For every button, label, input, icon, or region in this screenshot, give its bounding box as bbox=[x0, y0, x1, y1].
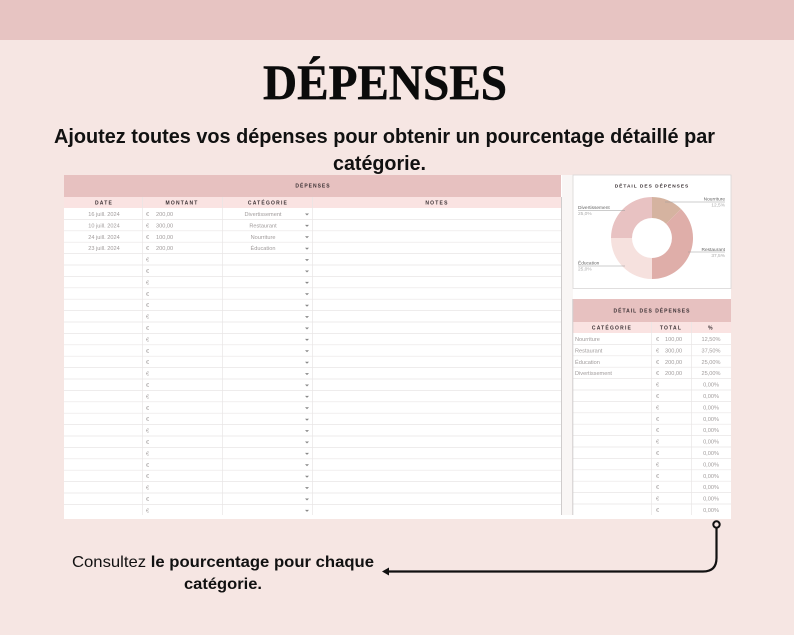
expense rows: € bbox=[146, 372, 150, 378]
category rows: € bbox=[656, 451, 660, 457]
category rows: € bbox=[656, 508, 660, 514]
arrow bbox=[382, 521, 720, 576]
dropdown arrows bbox=[305, 214, 309, 512]
expense rows: € bbox=[146, 303, 150, 309]
category column headers: TOTAL bbox=[660, 326, 682, 332]
category rows: 37,50% bbox=[702, 348, 721, 354]
expense rows: Nourriture bbox=[251, 235, 275, 241]
chart labels: 25,0% bbox=[578, 266, 592, 272]
expense rows: € bbox=[146, 212, 150, 218]
category rows: 200,00 bbox=[665, 371, 682, 377]
expense rows: € bbox=[146, 440, 150, 446]
expense rows: € bbox=[146, 394, 150, 400]
chart title: DÉTAIL DES DÉPENSES bbox=[615, 182, 689, 190]
chart labels: 25,0% bbox=[578, 211, 592, 217]
expense rows: € bbox=[146, 280, 150, 286]
category rows: € bbox=[656, 485, 660, 491]
category rows: € bbox=[656, 462, 660, 468]
callout text: Consultez le pourcentage pour chaque bbox=[72, 554, 374, 571]
chart labels: Éducation bbox=[578, 260, 600, 266]
expense rows: € bbox=[146, 235, 150, 241]
expense rows: € bbox=[146, 258, 150, 264]
expenses column headers: MONTANT bbox=[165, 200, 199, 206]
expense rows: 23 juill. 2024 bbox=[88, 246, 120, 252]
category column headers: CATÉGORIE bbox=[592, 324, 632, 332]
category rows: 0,00% bbox=[703, 474, 719, 480]
chart labels: Restaurant bbox=[702, 247, 726, 253]
expense rows: € bbox=[146, 429, 150, 435]
category rows: 0,00% bbox=[703, 440, 719, 446]
category rows: € bbox=[656, 371, 660, 377]
expense rows: € bbox=[146, 486, 150, 492]
expense rows: Divertissement bbox=[244, 212, 282, 218]
expense rows: 100,00 bbox=[156, 235, 173, 241]
category rows: 25,00% bbox=[702, 360, 721, 366]
category rows: € bbox=[656, 440, 660, 446]
expense rows: 200,00 bbox=[156, 212, 173, 218]
expense rows: € bbox=[146, 292, 150, 298]
chart labels: 12,5% bbox=[711, 202, 726, 208]
category rows: € bbox=[656, 360, 660, 366]
category rows: 0,00% bbox=[703, 428, 719, 434]
expense rows: € bbox=[146, 326, 150, 332]
category rows: 0,00% bbox=[703, 508, 719, 514]
expense rows: € bbox=[146, 463, 150, 469]
category rows: Nourriture bbox=[575, 337, 600, 343]
category rows: 25,00% bbox=[702, 371, 721, 377]
category rows: € bbox=[656, 348, 660, 354]
expenses column headers: CATÉGORIE bbox=[248, 198, 288, 206]
category rows: 300,00 bbox=[665, 348, 682, 354]
top band bbox=[0, 0, 794, 40]
category rows: 0,00% bbox=[703, 394, 719, 400]
expense rows: € bbox=[146, 508, 150, 514]
category table title bar bbox=[573, 299, 731, 322]
panel: expenses table bbox=[64, 175, 562, 515]
expense rows bbox=[88, 212, 282, 514]
expense rows: € bbox=[146, 474, 150, 480]
expense rows: € bbox=[146, 246, 150, 252]
expense rows: 200,00 bbox=[156, 246, 173, 252]
expense rows: € bbox=[146, 315, 150, 321]
category rows: € bbox=[656, 428, 660, 434]
chart labels: Divertissement bbox=[578, 205, 610, 211]
category rows: 0,00% bbox=[703, 417, 719, 423]
expense rows: € bbox=[146, 417, 150, 423]
category column headers: % bbox=[708, 326, 714, 332]
category rows: 100,00 bbox=[665, 337, 682, 343]
gap between tables bbox=[562, 175, 573, 515]
spreadsheet background bbox=[64, 175, 731, 519]
category rows: Éducation bbox=[575, 359, 600, 366]
chart labels: Nourriture bbox=[704, 196, 725, 202]
expense rows: 10 juill. 2024 bbox=[88, 223, 120, 229]
expense rows: € bbox=[146, 497, 150, 503]
expense rows: 24 juill. 2024 bbox=[88, 235, 120, 241]
panel: category table bbox=[573, 299, 731, 515]
callout text: catégorie. bbox=[184, 576, 262, 593]
chart labels: 37,5% bbox=[711, 253, 726, 259]
category rows: 0,00% bbox=[703, 462, 719, 468]
expense rows: € bbox=[146, 337, 150, 343]
expense rows: 300,00 bbox=[156, 223, 173, 229]
category rows: € bbox=[656, 497, 660, 503]
category table title bar: DÉTAIL DES DÉPENSES bbox=[614, 306, 690, 314]
subtitle: Ajoutez toutes vos dépenses pour obtenir un pourcentage détaillé par bbox=[54, 126, 715, 148]
category rows: Restaurant bbox=[575, 348, 603, 354]
expense rows: € bbox=[146, 223, 150, 229]
category rows: € bbox=[656, 337, 660, 343]
category rows: € bbox=[656, 405, 660, 411]
category rows: 0,00% bbox=[703, 383, 719, 389]
expense rows: Éducation bbox=[251, 245, 275, 252]
expense rows: € bbox=[146, 360, 150, 366]
title: DÉPENSES bbox=[263, 54, 507, 110]
category rows: 200,00 bbox=[665, 360, 682, 366]
category rows: 0,00% bbox=[703, 485, 719, 491]
expense rows: € bbox=[146, 406, 150, 412]
category rows: 0,00% bbox=[703, 451, 719, 457]
expense rows: Restaurant bbox=[249, 223, 277, 229]
expenses table title bar bbox=[64, 175, 561, 197]
category rows: € bbox=[656, 474, 660, 480]
category rows: € bbox=[656, 417, 660, 423]
expense rows: € bbox=[146, 269, 150, 275]
category rows: Divertissement bbox=[575, 371, 612, 377]
panel: donut chart bbox=[573, 175, 731, 288]
category rows: 12,50% bbox=[702, 337, 721, 343]
category rows: € bbox=[656, 394, 660, 400]
expenses column headers: NOTES bbox=[425, 200, 449, 206]
expenses column headers bbox=[64, 197, 561, 208]
expense rows: 16 juill. 2024 bbox=[88, 212, 120, 218]
expense rows: € bbox=[146, 451, 150, 457]
expenses column headers: DATE bbox=[95, 200, 113, 206]
donut bbox=[611, 197, 693, 279]
subtitle bbox=[54, 126, 715, 175]
category rows: 0,00% bbox=[703, 405, 719, 411]
category rows bbox=[575, 337, 721, 514]
expense rows: € bbox=[146, 349, 150, 355]
expense rows: € bbox=[146, 383, 150, 389]
category rows: € bbox=[656, 383, 660, 389]
callout text bbox=[72, 554, 374, 593]
category rows: 0,00% bbox=[703, 497, 719, 503]
subtitle: catégorie. bbox=[333, 153, 426, 175]
category column headers bbox=[573, 322, 731, 333]
expenses table title bar: DÉPENSES bbox=[295, 182, 331, 190]
chart labels bbox=[578, 196, 726, 272]
